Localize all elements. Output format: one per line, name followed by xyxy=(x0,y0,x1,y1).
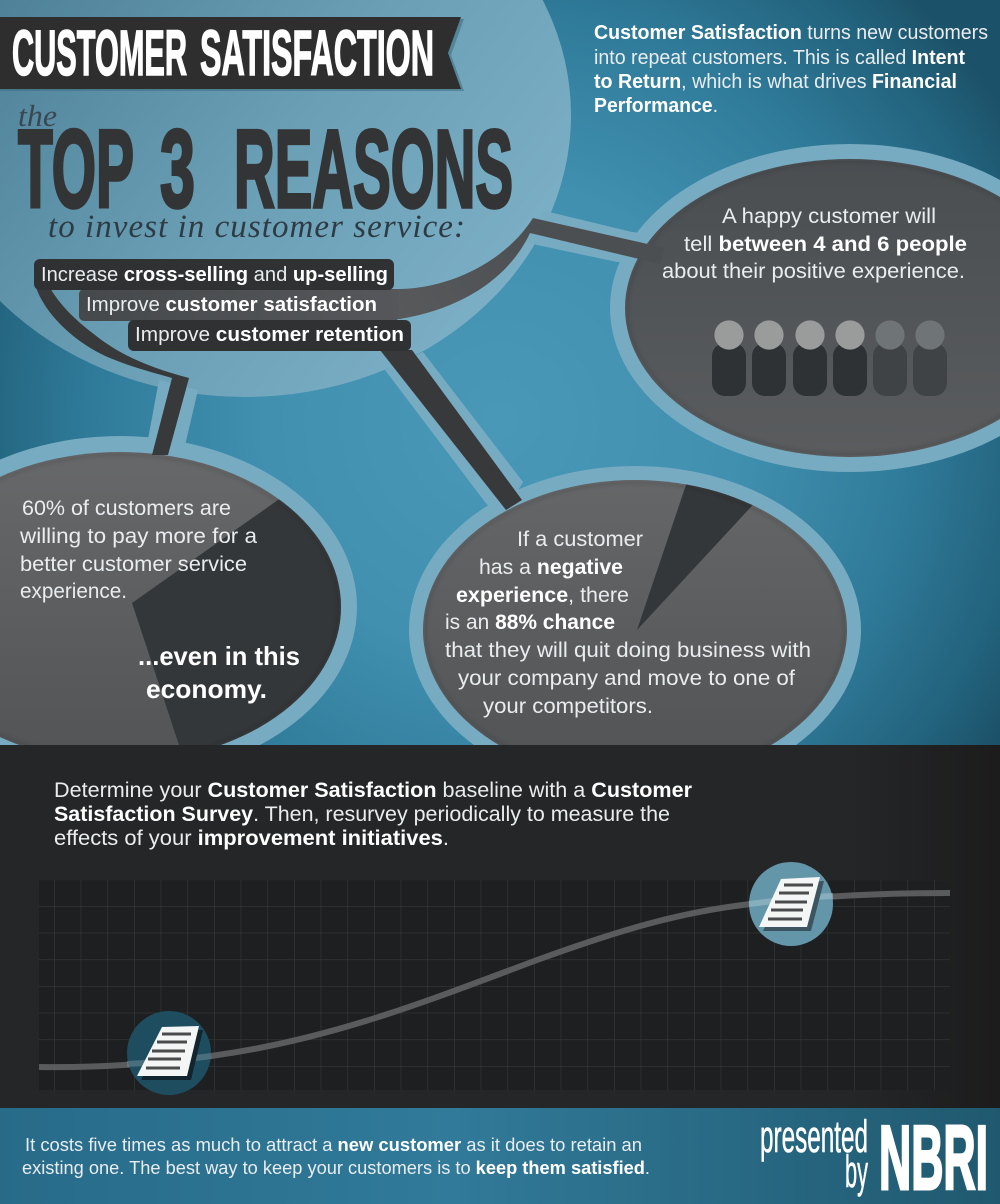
text block: happy customer: A happy customer will xyxy=(722,205,936,228)
text block: happy customer: about their positive experience. xyxy=(662,260,965,283)
text block: survey: effects of your improvement initiatives . xyxy=(54,827,449,850)
connector: curved line to 60 percent bubble xyxy=(34,280,189,455)
text block: survey: Determine your Customer Satisfaction baseline with a Customer xyxy=(54,779,692,802)
text block: 88 percent: has a negative xyxy=(479,556,623,579)
connector: curved band to happy customer bubble xyxy=(385,218,665,319)
line chart xyxy=(39,880,950,1090)
callout: even in this economy xyxy=(138,641,300,704)
callout: even in this economy: economy. xyxy=(146,674,267,704)
text block: footer xyxy=(22,1135,650,1178)
text block: 88 percent xyxy=(445,528,811,718)
text block: footer: existing one. The best way to keep your customers is to keep them satisfied. xyxy=(22,1158,650,1178)
heading: top 3 reasons xyxy=(18,108,513,231)
heading: top 3 reasons: TOP xyxy=(18,108,134,231)
text block: intro xyxy=(594,22,988,117)
text block: 60 percent: 60% of customers are xyxy=(22,497,231,520)
text block: 60 percent: better customer service xyxy=(20,553,247,576)
text block: 60 percent: experience. xyxy=(20,580,127,603)
ribbon: title banner: SATISFACTION xyxy=(200,17,434,89)
subheading: to invest in customer service: xyxy=(48,209,465,245)
marker: first survey xyxy=(127,1011,211,1095)
marker: second survey xyxy=(749,862,833,946)
text block: 88 percent: your company and move to one of xyxy=(458,667,795,690)
text block: intro: to Return, which is what drives Financial xyxy=(594,71,957,93)
heading: top 3 reasons: 3 xyxy=(160,108,195,231)
panel: dark survey section xyxy=(0,745,1000,1108)
logo: presented by NBRI xyxy=(760,1108,988,1204)
logo: presented by NBRI: by xyxy=(845,1146,868,1197)
callout: even in this economy: ...even in this xyxy=(138,641,300,671)
text block: 88 percent: your competitors. xyxy=(483,695,653,718)
list: three reasons: Improve customer satisfaction xyxy=(86,294,377,316)
text block: survey xyxy=(54,779,692,850)
connector frames xyxy=(146,211,660,520)
logo: presented by NBRI: presented xyxy=(760,1111,868,1162)
text block: intro: Customer Satisfaction turns new customers xyxy=(594,22,988,44)
list: three reasons: Increase cross-selling and up-selling xyxy=(41,264,388,286)
panel: 60 percent pie bubble xyxy=(0,436,357,745)
ribbon: title banner: CUSTOMER xyxy=(12,17,187,89)
text block: 88 percent: If a customer xyxy=(517,528,643,551)
heading: the: the xyxy=(18,98,57,133)
list: three reasons: Improve customer retention xyxy=(135,324,404,346)
text block: happy customer xyxy=(662,205,967,283)
panel: 88 percent pie bubble xyxy=(409,466,861,745)
text block: 88 percent: that they will quit doing business with xyxy=(445,639,811,662)
heading: top 3 reasons: REASONS xyxy=(234,108,513,231)
text block: intro: into repeat customers. This is called Intent xyxy=(594,47,965,69)
connector: straight line to 88 percent bubble xyxy=(380,350,522,510)
blue background xyxy=(0,0,1000,750)
icon: six people xyxy=(712,320,947,396)
text block: 88 percent: experience, there xyxy=(456,584,629,607)
text block: 60 percent: willing to pay more for a xyxy=(19,525,257,548)
text block: 60 percent xyxy=(19,497,257,603)
text block: survey: Satisfaction Survey. Then, resurvey periodically to measure the xyxy=(54,803,670,826)
text block: happy customer: tell between 4 and 6 people xyxy=(684,233,967,256)
panel: happy customer bubble xyxy=(610,144,1000,472)
panel: big title circle xyxy=(0,0,571,397)
list: three reasons xyxy=(34,259,411,351)
text block: 88 percent: is an 88% chance xyxy=(445,611,615,634)
panel: footer xyxy=(0,1108,1000,1204)
text block: intro: Performance. xyxy=(594,95,718,117)
text block: footer: It costs five times as much to attract a new customer as it does to retain an xyxy=(25,1135,642,1155)
